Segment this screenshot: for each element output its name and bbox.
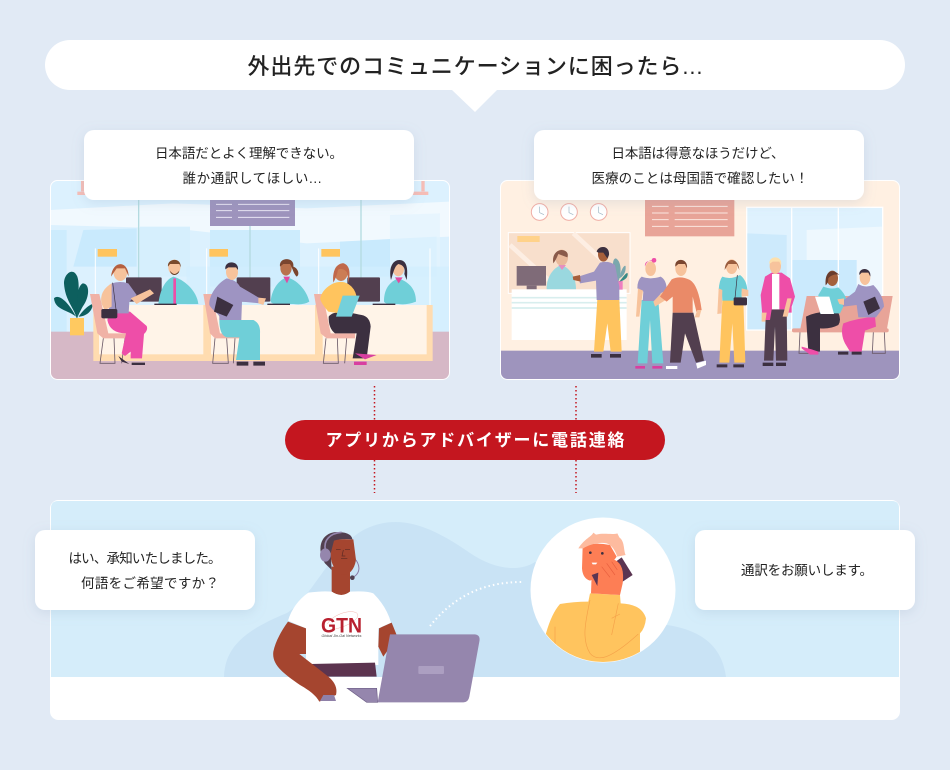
staff member 3 bbox=[384, 260, 416, 304]
face bbox=[582, 544, 617, 581]
background hills bbox=[224, 522, 726, 677]
neck and head bbox=[320, 532, 356, 595]
information board bbox=[210, 198, 295, 226]
receptionist bbox=[517, 250, 576, 289]
monitors bbox=[126, 277, 380, 302]
ceiling lamps bbox=[77, 181, 428, 193]
speech bubble: caller: 通訳をお願いします。 bbox=[741, 563, 873, 578]
laptop bbox=[347, 634, 480, 702]
reception window bbox=[508, 233, 630, 293]
reception plant bbox=[613, 258, 628, 290]
heading speech bubble bbox=[45, 40, 905, 112]
mouth bbox=[592, 563, 597, 564]
arm bbox=[273, 622, 336, 702]
floor bbox=[501, 351, 899, 381]
speech bubble: left customer bbox=[84, 130, 414, 200]
speech bubble: right customer bbox=[534, 130, 864, 200]
service desk bbox=[93, 304, 433, 361]
man in pink jacket bbox=[761, 257, 795, 366]
customer 1 bbox=[90, 264, 154, 365]
information board bbox=[645, 198, 734, 236]
waistband bbox=[310, 663, 377, 677]
visitor at counter bbox=[573, 247, 622, 358]
yellow sweater bbox=[537, 593, 646, 663]
phone bbox=[616, 557, 633, 582]
speech bubble: left customer: 誰か通訳してほしい... bbox=[182, 171, 322, 186]
woman with shoulder bag bbox=[717, 259, 748, 367]
speech bubble: adviser bbox=[35, 530, 255, 610]
dotted call arc bbox=[430, 582, 522, 626]
title: 外出先でのコミュニケーションに困ったら... bbox=[248, 54, 702, 79]
hair bbox=[578, 533, 626, 557]
speech bubble: left customer: 日本語だとよく理解できない。 bbox=[155, 146, 343, 161]
speech bubble: right customer: 日本語は得意なほうだけど、 bbox=[612, 145, 784, 161]
speech bubble: caller bbox=[695, 530, 915, 610]
panel: right scene, hospital reception bbox=[500, 180, 900, 381]
waiting bench bbox=[792, 296, 893, 353]
staff member 1 bbox=[158, 260, 198, 304]
GTN logo text: GTN bbox=[321, 614, 362, 638]
counter partitions and signs bbox=[95, 248, 430, 307]
hand bbox=[320, 695, 336, 701]
window background bbox=[51, 181, 449, 334]
speech bubble: adviser: 何語をご希望ですか？ bbox=[81, 576, 219, 591]
customer 2 bbox=[203, 262, 266, 366]
reception counter bbox=[512, 289, 627, 340]
white T-shirt bbox=[288, 591, 391, 665]
panel: adviser call bbox=[50, 500, 900, 720]
woman in teal trousers bbox=[635, 258, 668, 369]
hand on phone bbox=[591, 560, 623, 595]
dotted connector lines bbox=[374, 386, 576, 493]
adviser with headset bbox=[273, 532, 480, 702]
man in orange sweater bbox=[660, 260, 706, 369]
seated man with folder bbox=[837, 269, 884, 355]
plant bbox=[54, 272, 93, 335]
seated woman bbox=[802, 271, 847, 355]
speech bubble: adviser: はい、承知いたしました。 bbox=[68, 550, 222, 566]
window bbox=[747, 207, 883, 330]
right arm bbox=[378, 623, 397, 657]
customer 3 bbox=[314, 263, 377, 365]
floor bbox=[51, 332, 449, 380]
logo swoosh bbox=[327, 612, 358, 630]
eyes bbox=[589, 551, 604, 555]
red action pill bbox=[285, 420, 665, 460]
GTN logo text: Global Jin-Gai Networks bbox=[322, 633, 362, 638]
panel: left scene, counter service bbox=[50, 180, 450, 380]
caller in white circle bbox=[530, 518, 676, 663]
red action pill: アプリからアドバイザーに電話連絡 bbox=[326, 431, 624, 450]
wall clocks bbox=[531, 204, 607, 220]
staff member 2 bbox=[271, 259, 309, 304]
speech bubble: right customer: 医療のことは母国語で確認したい！ bbox=[592, 171, 808, 186]
headset bbox=[320, 532, 359, 580]
